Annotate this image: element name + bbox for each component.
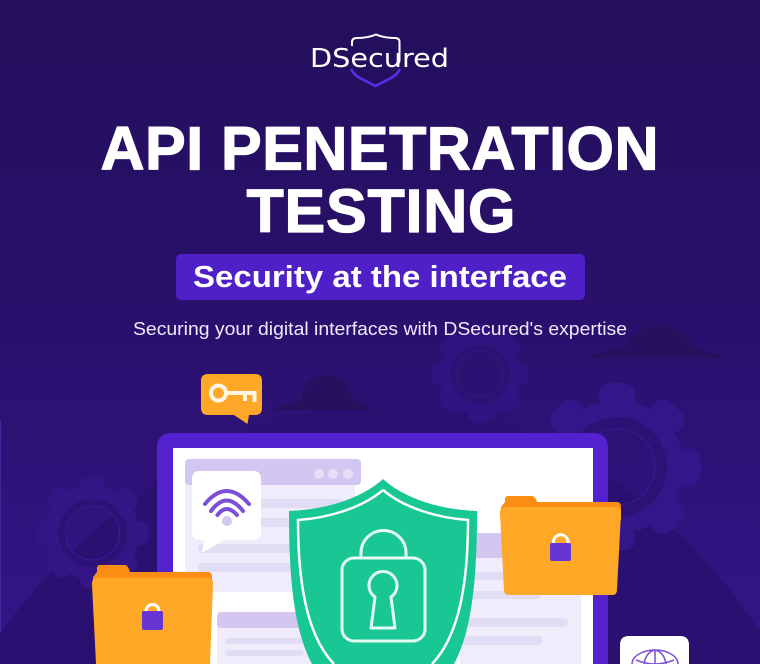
logo shield outline	[352, 34, 400, 65]
title: TESTING	[246, 177, 516, 245]
icon: shield with lock	[289, 479, 477, 664]
panel: top left window	[185, 459, 361, 592]
panel: bottom left window	[217, 612, 312, 664]
panel: right window	[460, 533, 581, 664]
lock body	[342, 558, 425, 641]
title: API PENETRATION	[100, 114, 658, 182]
logo wordmark: DSecured	[310, 44, 449, 74]
gear upper	[438, 332, 522, 416]
subtitle pill: Security at the interface	[193, 260, 567, 294]
icon: globe card	[620, 636, 689, 664]
gear left	[44, 485, 140, 581]
background cloud left	[272, 375, 372, 410]
gear right	[545, 395, 689, 539]
title	[100, 114, 658, 245]
background cloud right	[589, 325, 721, 358]
monitor	[157, 433, 608, 664]
icon: key bubble	[201, 374, 262, 424]
icon: left folder	[92, 565, 213, 664]
lock shackle	[361, 530, 406, 557]
keyhole	[369, 572, 397, 628]
background hill	[0, 402, 760, 664]
icon: wifi bubble	[192, 471, 261, 553]
tagline: Securing your digital interfaces with DSecured's expertise	[133, 319, 627, 339]
logo shield base	[351, 69, 400, 86]
logo	[310, 34, 449, 86]
icon: right folder	[500, 496, 621, 595]
subtitle pill	[176, 254, 585, 300]
